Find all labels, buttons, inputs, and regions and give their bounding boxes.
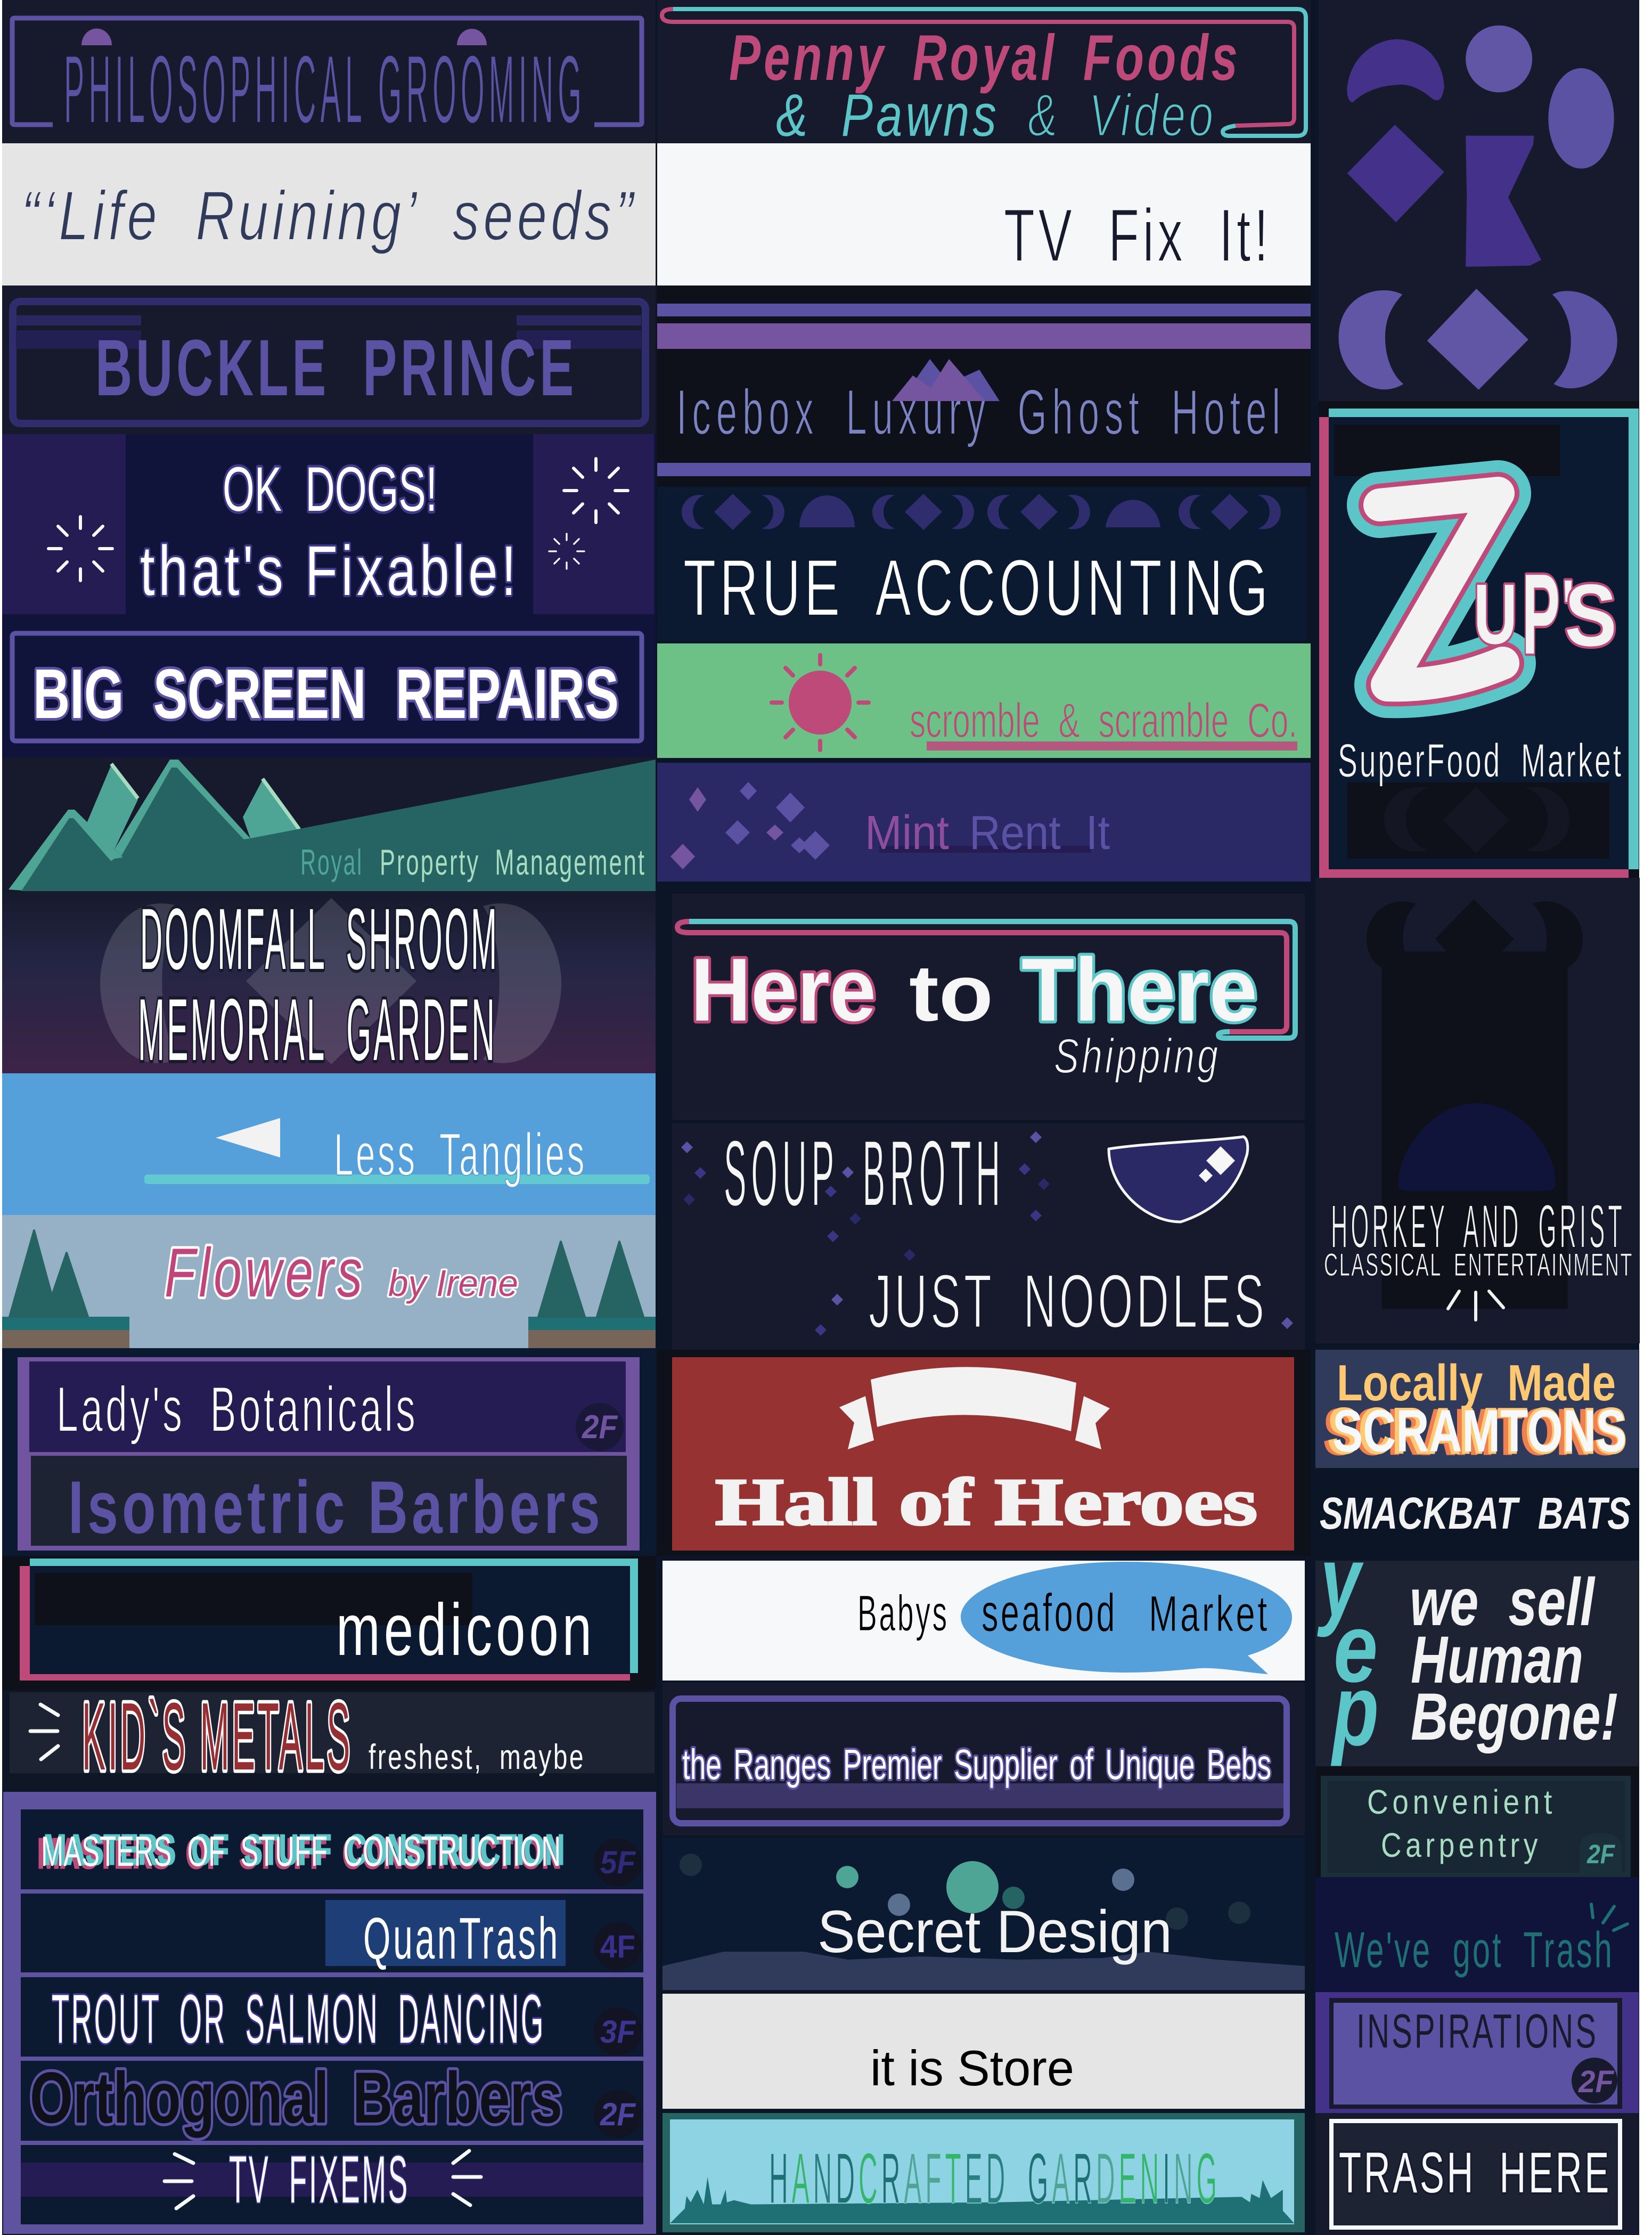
floor 4: QuanTrash: [21, 1894, 643, 1972]
sign name: BUCKLE PRINCE: [95, 323, 577, 412]
dots: [680, 1854, 1250, 1930]
floor badge: 2F: [1578, 2065, 1615, 2099]
sign name: Secret Design: [817, 1898, 1172, 1965]
sign name: Property Management: [380, 842, 646, 883]
icon: sparkle left: [48, 517, 112, 581]
sign line one: OK DOGS!: [223, 454, 437, 525]
panel: Trash Here: [1315, 2113, 1639, 2235]
panel: Soup Broth Just Noodles: SOUP BROTH: [724, 1122, 1005, 1226]
speech bubble: [961, 1562, 1292, 1674]
panel: abstract shapes: [1319, 0, 1639, 401]
panel: Handcrafted Gardening: [663, 2113, 1305, 2232]
panel: Babys Seafood Market: [663, 1561, 1305, 1681]
hills: [663, 1952, 1305, 1990]
icon: bowl: [1109, 1137, 1248, 1222]
panel: Doomfall Shroom Memorial Garden: MEMORIAL GARDEN: [138, 981, 497, 1079]
panel: Smackbat Bats: [1315, 1468, 1639, 1561]
icon: sparkle right small: [549, 534, 584, 569]
panel: Secret Design: [663, 1838, 1305, 1990]
panel: Flowers by Irene: [2, 1215, 656, 1348]
scattered diamonds: [681, 1131, 1293, 1336]
panel: OK Dogs that's Fixable: [2, 434, 656, 614]
logo: UP'S letters: U: [1474, 566, 1517, 662]
faded moons and diamond: [1384, 787, 1569, 853]
sign name: Royal: [300, 842, 363, 883]
floor 2: Orthogonal Barbers: 2F: [600, 2097, 636, 2132]
logo: Z letter: [1380, 493, 1503, 685]
panel: True Accounting: [657, 487, 1306, 641]
floor 5: Masters of Stuff Construction: MASTERS OF STUFF CONSTRUCTION: [37, 1830, 561, 1877]
grassy ground: [670, 2177, 1294, 2223]
panel: Horkey and Grist Classical Entertainment: [1315, 878, 1640, 1343]
panel: it is Store: [663, 1994, 1305, 2109]
sign name: There: There: [1021, 940, 1257, 1040]
neon frame lines: [677, 921, 1295, 1038]
sign name: Rent It: [969, 806, 1110, 860]
scattered diamonds: [689, 787, 706, 812]
sign byline: by Irene: [388, 1262, 518, 1304]
icon: spark ticks: [1448, 1291, 1503, 1320]
floor 1: TV Fixems: TV FIXEMS: [229, 2143, 410, 2217]
sign name: HANDCRAFTED GARDENING: [769, 2138, 1221, 2218]
icon: mountains: [905, 359, 1000, 401]
panel: TV Fix It: [657, 143, 1311, 286]
shape cluster: [1339, 26, 1617, 390]
icon: ribbon banner: [839, 1367, 1110, 1449]
sign line one: Convenient: [1367, 1783, 1556, 1821]
sign name: medicoon: [336, 1589, 595, 1671]
tagline: freshest, maybe: [369, 1737, 585, 1776]
panel: Yep we sell Human Begone: [1315, 1525, 1639, 1767]
sign line one: we sell: [1410, 1564, 1596, 1639]
sign word: Babys: Babys: [857, 1585, 949, 1642]
sign name: Lady's Botanicals: [56, 1374, 418, 1445]
panel: Lady's Botanicals and Isometric Barbers: [2, 1348, 656, 1556]
icon: arrow triangle: [216, 1118, 280, 1157]
floor 4: QuanTrash: QuanTrash: [363, 1906, 560, 1971]
floor 5: Masters of Stuff Construction: MASTERS OF STUFF CONSTRUCTION: [41, 1828, 561, 1875]
mountains: [9, 760, 656, 891]
sign name: Here: Here: [691, 940, 876, 1040]
panel: Zup's SuperFood Market: [1319, 401, 1639, 878]
sign name: [300, 842, 646, 883]
panel: Less Tanglies: [2, 1073, 656, 1215]
sign name: Mint: [865, 806, 949, 860]
panel: building directory floors: TROUT OR SALMON DANCING: [52, 1980, 545, 2058]
panel: Scromble and Scramble Co: [657, 643, 1311, 758]
sign name: TV Fix It!: [1004, 193, 1272, 277]
sign line two: [776, 82, 1216, 149]
panel: building directory floors: [3, 1792, 656, 2234]
panel: medicoon: [2, 1556, 656, 1690]
panel: Life Ruining seeds: [2, 143, 656, 286]
sign line two: JUST NOODLES: [869, 1259, 1267, 1344]
panel: Icebox Luxury Ghost Hotel: [657, 286, 1311, 487]
panel: Here to There Shipping: [672, 894, 1305, 1120]
neon frame lines: [662, 9, 1306, 136]
tower silhouette: [1367, 899, 1583, 1309]
sign name: Less Tanglies: [334, 1121, 587, 1188]
panel: Royal Property Management: [2, 757, 656, 891]
vertical word: yep: y: [1317, 1525, 1364, 1638]
floor badge: 2F: [582, 1409, 618, 1446]
floor 3: Trout or Salmon Dancing: 3F: [600, 2014, 636, 2050]
panel: Inspirations: [1315, 1992, 1639, 2113]
floor 4: QuanTrash: 4F: [600, 1929, 635, 1964]
sign name: scromble & scramble Co.: [910, 694, 1297, 748]
sign word: Market: Market: [1149, 1586, 1270, 1642]
panel: Locally Made Scramtons: [1315, 1350, 1639, 1468]
trees: [10, 1230, 643, 1317]
panel: Kid's Metals: KID`S METALS: [82, 1683, 353, 1790]
pattern row: [682, 494, 1281, 530]
icon: sun: [772, 655, 869, 750]
floor 3: Trout or Salmon Dancing: [21, 1977, 643, 2058]
icon: spark ticks: [1591, 1904, 1628, 1930]
sign name: [865, 806, 1110, 860]
sign name: BIG SCREEN REPAIRS: [33, 655, 619, 733]
logo: UP'S letters: ': [1562, 562, 1574, 657]
sign name: TRUE ACCOUNTING: [683, 543, 1272, 632]
floor 5: Masters of Stuff Construction: 5F: [600, 1845, 636, 1880]
subtitle: Shipping: [1054, 1029, 1221, 1083]
panel: Doomfall Shroom Memorial Garden: [2, 890, 656, 1079]
vertical word: yep: [1317, 1525, 1379, 1767]
sign name: “‘Life Ruining’ seeds”: [21, 176, 637, 255]
panel: Penny Royal Foods and Pawns and Video: [657, 0, 1311, 149]
sign name: to: to: [909, 948, 993, 1038]
panel: Convenient Carpentry: [1315, 1766, 1639, 1877]
panel: Soup Broth Just Noodles: [672, 1122, 1305, 1350]
panel: Big Screen Repairs: [2, 614, 656, 757]
logo: UP'S letters: S: [1565, 566, 1617, 664]
sign word: seafood: seafood: [982, 1583, 1117, 1643]
sign line two: & Video: [1028, 82, 1216, 149]
icon: spark ticks: [30, 1704, 58, 1759]
sign line two: Human: [1411, 1623, 1583, 1697]
sign line two: Carpentry: [1381, 1826, 1542, 1864]
panel: Hall of Heroes: [657, 1350, 1311, 1556]
vertical word: yep: e: [1334, 1593, 1378, 1702]
floor 1: TV Fixems: [21, 2143, 643, 2224]
icon: sparkle right large: [564, 459, 628, 523]
floor 5: Masters of Stuff Construction: MASTERS OF STUFF CONSTRUCTION: [44, 1826, 565, 1873]
panel: We've got Trash: [1315, 1877, 1639, 1992]
sign name: Isometric Barbers: [68, 1465, 604, 1549]
logo: UP'S letters: [1474, 550, 1617, 678]
logo: UP'S letters: P: [1522, 550, 1560, 678]
sign name: the Ranges Premier Supplier of Unique Bebs: [682, 1741, 1271, 1788]
sign line two: & Pawns: [776, 82, 1000, 149]
panel: Kid's Metals: [2, 1683, 656, 1792]
floor badge: [1572, 2058, 1617, 2103]
panel: Mint Rent It: [657, 763, 1311, 882]
floor badge: [1580, 1833, 1622, 1873]
panel: the Ranges Premier Supplier: [663, 1683, 1305, 1836]
floor badge: 2F: [1586, 1839, 1615, 1869]
floor badge: [576, 1403, 624, 1451]
floor 5: Masters of Stuff Construction: [21, 1809, 643, 1889]
floor 2: Orthogonal Barbers: Orthogonal Barbers: [30, 2057, 562, 2138]
vertical word: yep: p: [1330, 1654, 1379, 1767]
sign name: Flowers: [165, 1234, 366, 1311]
panel: Philosophical Grooming: [2, 0, 656, 143]
sign name: it is Store: [870, 2040, 1074, 2096]
sign line one: Penny Royal Foods: [729, 21, 1241, 94]
panel: Doomfall Shroom Memorial Garden: DOOMFALL SHROOM: [140, 890, 499, 988]
sign line two: that's Fixable!: [140, 532, 520, 610]
sign name: Hall of Heroes: [715, 1465, 1257, 1539]
panel: Buckle Prince: [2, 286, 656, 434]
